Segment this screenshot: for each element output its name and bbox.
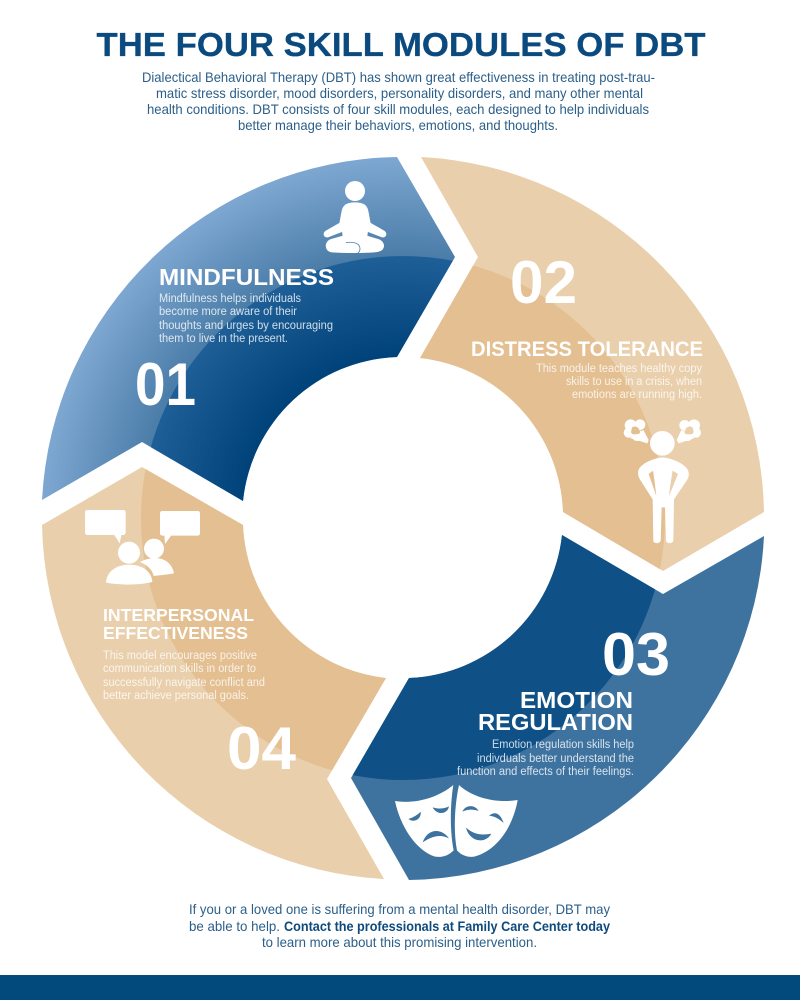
- heading: interpersonal effectiveness: EFFECTIVENESS: [103, 623, 248, 643]
- description: mindfulness: become more aware of their: [159, 306, 297, 318]
- description: emotion regulation: indivduals better understand the: [477, 753, 634, 765]
- description: interpersonal effectiveness: communication skills in order to: [103, 663, 256, 675]
- icon: two people with speech bubbles: [85, 510, 200, 585]
- closing text: Contact the professionals at Family Care Center today: [284, 918, 610, 934]
- description: distress tolerance: [536, 363, 702, 401]
- intro text: [142, 69, 655, 133]
- heading: distress tolerance: DISTRESS TOLERANCE: [471, 338, 703, 361]
- heading: emotion regulation: [478, 687, 633, 735]
- panel: module 01 mindfulness: [42, 157, 455, 501]
- closing text: to learn more about this promising intervention.: [262, 934, 537, 950]
- icon: angry person: [624, 419, 701, 543]
- panel: module 04 interpersonal effectiveness: [42, 467, 386, 879]
- description: mindfulness: Mindfulness helps individuals: [159, 293, 301, 305]
- intro text: matic stress disorder, mood disorders, personality disorders, and many other mental: [156, 85, 643, 101]
- heading: emotion regulation: REGULATION: [478, 709, 633, 735]
- description: interpersonal effectiveness: [103, 650, 265, 702]
- footer bar: [0, 975, 800, 1000]
- description: mindfulness: [159, 293, 333, 345]
- description: emotion regulation: Emotion regulation skills help: [492, 739, 634, 751]
- description: distress tolerance: skills to use in a crisis, when: [566, 376, 702, 388]
- closing text: If you or a loved one is suffering from a mental health disorder, DBT may: [189, 901, 610, 917]
- description: interpersonal effectiveness: better achieve personal goals.: [103, 690, 249, 702]
- description: interpersonal effectiveness: This model encourages positive: [103, 650, 257, 662]
- description: mindfulness: them to live in the present.: [159, 333, 288, 345]
- description: emotion regulation: [457, 739, 634, 778]
- number 04: 04: [227, 715, 297, 782]
- closing text: [189, 901, 610, 950]
- intro text: Dialectical Behavioral Therapy (DBT) has shown great effectiveness in treating post-trau-: [142, 69, 655, 85]
- heading: mindfulness: MINDFULNESS: [159, 264, 334, 290]
- description: interpersonal effectiveness: successfully navigate conflict and: [103, 677, 265, 689]
- number 01: 01: [135, 351, 196, 418]
- description: mindfulness: thoughts and urges by encouraging: [159, 320, 333, 332]
- description: emotion regulation: function and effects of their feelings.: [457, 766, 634, 778]
- icon: meditating person: [324, 181, 386, 253]
- intro text: better manage their behaviors, emotions, and thoughts.: [238, 117, 558, 133]
- number 02: 02: [510, 249, 577, 316]
- description: distress tolerance: emotions are running high.: [572, 389, 702, 401]
- heading: interpersonal effectiveness: INTERPERSONAL: [103, 605, 254, 625]
- heading: emotion regulation: EMOTION: [520, 687, 633, 713]
- icon: theater masks: [395, 785, 518, 857]
- title: THE FOUR SKILL MODULES OF DBT: [96, 27, 706, 64]
- heading: interpersonal effectiveness: [103, 605, 254, 643]
- intro text: health conditions. DBT consists of four skill modules, each designed to help individuals: [147, 101, 649, 117]
- closing text: be able to help.: [189, 918, 280, 934]
- panel: module 03 emotion regulation: [351, 535, 764, 880]
- description: distress tolerance: This module teaches healthy copy: [536, 363, 702, 375]
- panel: module 02 distress tolerance: [420, 157, 764, 571]
- number 03: 03: [602, 621, 670, 688]
